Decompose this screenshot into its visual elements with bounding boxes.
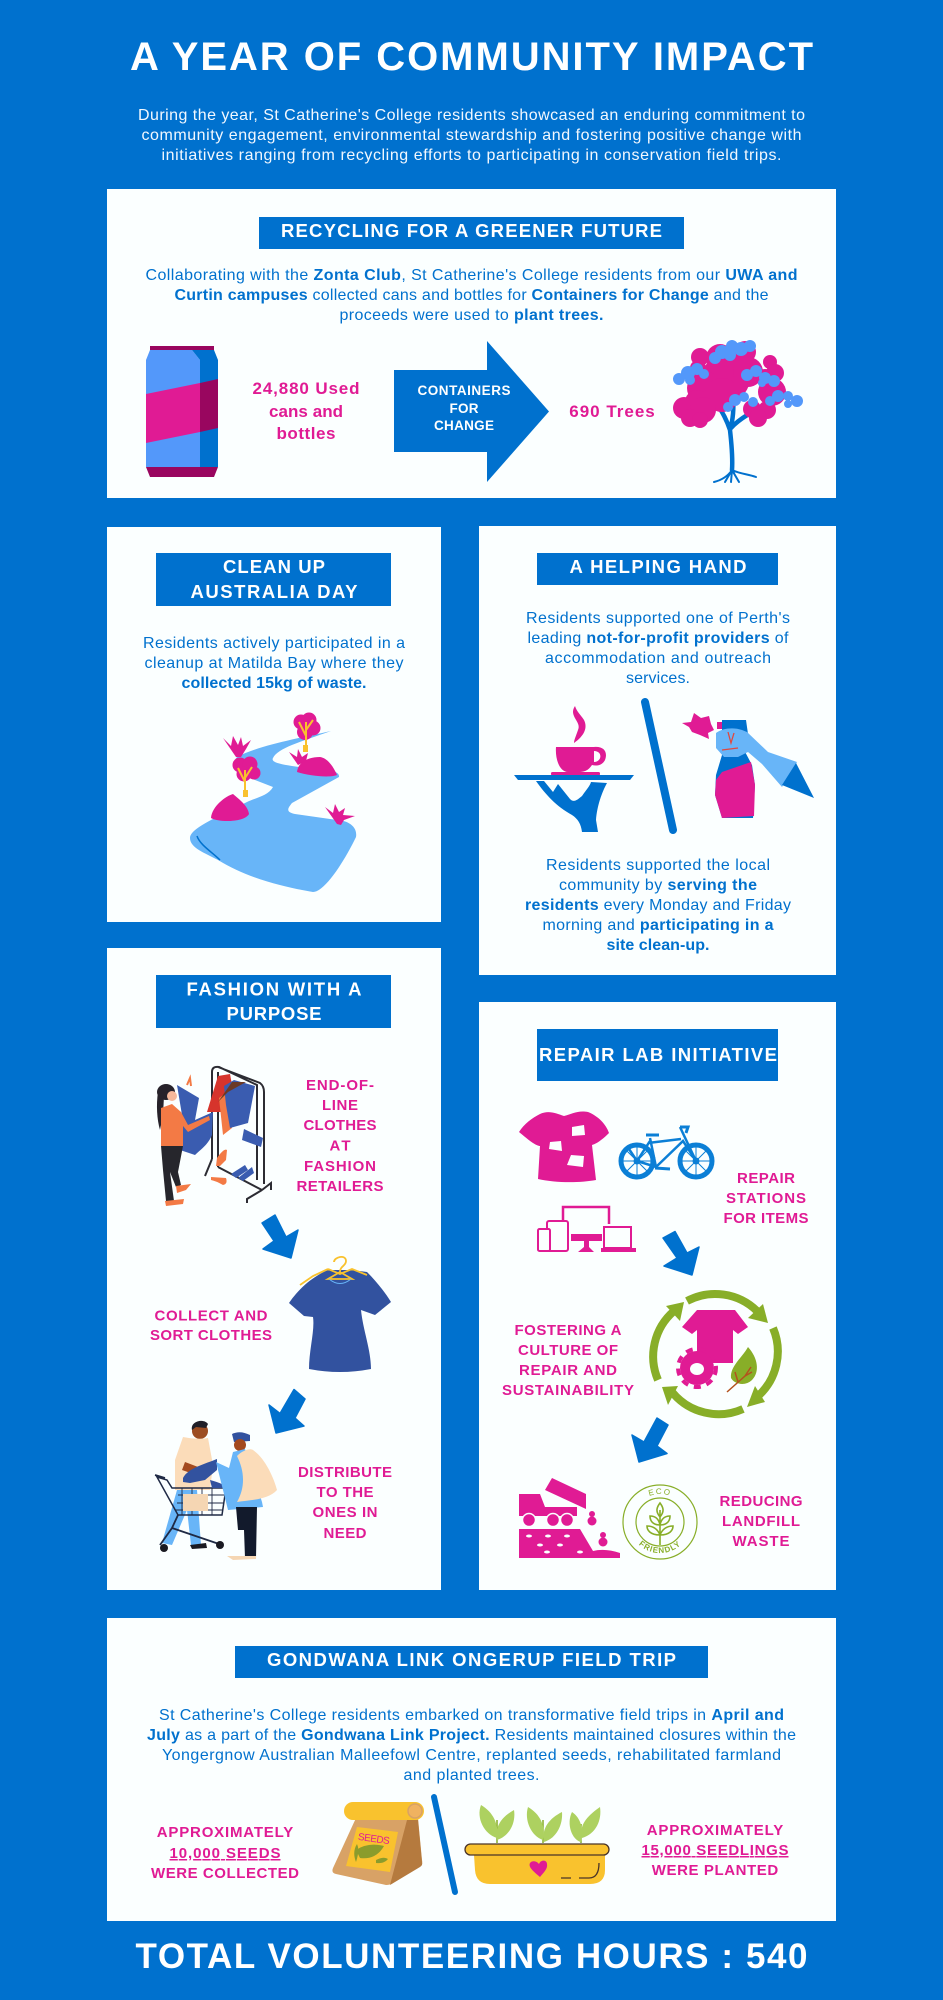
heading: gondwana: GONDWANA LINK ONGERUP FIELD TRIP <box>267 1649 676 1670</box>
text: helping description two: site clean-up. <box>606 937 710 954</box>
text: seedlings planted: WERE PLANTED <box>652 1862 778 1879</box>
text: cans count <box>252 379 360 443</box>
text: gondwana description: St Catherine's College residents embarked on transformative field trips in April and <box>159 1707 784 1724</box>
arrow: containers for change: CHANGE <box>434 418 494 433</box>
text: fostering a culture: FOSTERING A <box>514 1322 622 1339</box>
heading: gondwana <box>235 1646 708 1678</box>
text: helping description one: services. <box>626 670 690 687</box>
text: helping description one: accommodation and outreach <box>545 650 771 667</box>
text: clean up description: cleanup at Matilda Bay where they <box>144 655 404 672</box>
text: fostering a culture: SUSTAINABILITY <box>502 1382 634 1399</box>
panel: gondwana link <box>107 1618 836 1921</box>
heading: helping hand <box>537 553 778 585</box>
text: clean up description <box>143 635 405 692</box>
icon: eco friendly badge <box>622 1484 698 1560</box>
panel: a helping hand <box>479 526 836 975</box>
icon: patched t-shirt <box>519 1111 609 1182</box>
icon: bicycle <box>621 1127 712 1177</box>
text: helping description one: leading not-for-profit providers of <box>528 630 789 647</box>
text: seeds collected <box>151 1824 299 1882</box>
icon: hand with spray bottle <box>682 713 814 818</box>
text: gondwana description <box>147 1707 796 1784</box>
text: end-of-line clothes: LINE <box>322 1097 358 1114</box>
text: helping description one <box>526 610 790 687</box>
text: distribute: DISTRIBUTE <box>298 1464 392 1481</box>
arrow: containers for change <box>394 341 549 482</box>
heading: recycling: RECYCLING FOR A GREENER FUTURE <box>281 220 662 241</box>
intro text: During the year, St Catherine's College residents showcased an enduring commitment to <box>138 107 805 124</box>
intro text <box>138 107 805 164</box>
text: seeds collected: 10,000 SEEDS <box>170 1845 280 1862</box>
arrow: containers for change: CONTAINERS <box>418 383 510 398</box>
title: A YEAR OF COMMUNITY IMPACT <box>130 35 813 79</box>
text: end-of-line clothes: CLOTHES <box>304 1117 376 1134</box>
panel: fashion with a purpose <box>107 948 441 1590</box>
heading: repair lab: REPAIR LAB INITIATIVE <box>539 1044 777 1065</box>
text: recycling description: Collaborating with the Zonta Club, St Catherine's College residents from our UWA and <box>146 267 798 284</box>
text: gondwana description: July as a part of the Gondwana Link Project. Residents maintained closures within the <box>147 1727 796 1744</box>
text: trees count: 690 Trees <box>569 402 655 421</box>
text: seedlings planted: APPROXIMATELY <box>647 1822 783 1839</box>
text: gondwana description: and planted trees. <box>404 1767 540 1784</box>
icon: dump truck and landfill <box>519 1478 620 1558</box>
icon: river with trees <box>190 712 356 892</box>
text: helping description two: residents every Monday and Friday <box>525 897 791 914</box>
text: end-of-line clothes <box>296 1077 384 1195</box>
text: recycling description <box>146 267 798 324</box>
text: distribute: ONES IN <box>312 1504 378 1521</box>
intro text: initiatives ranging from recycling efforts to participating in conservation field trips. <box>162 147 782 164</box>
text: seeds collected: APPROXIMATELY <box>157 1824 293 1841</box>
heading: fashion: FASHION WITH A <box>186 978 362 1000</box>
panel: clean up australia day <box>107 527 441 922</box>
icon: seedlings in pot <box>465 1805 609 1884</box>
heading: clean up <box>156 553 391 606</box>
arrow: down right <box>663 1232 699 1275</box>
panel: recycling <box>107 189 836 498</box>
text: repair stations <box>724 1170 808 1227</box>
panel: repair lab initiative <box>479 1002 836 1590</box>
text: repair stations: STATIONS <box>726 1190 806 1207</box>
icon: seed bag <box>332 1802 424 1885</box>
icon: electronic devices <box>538 1207 636 1252</box>
text: helping description one: Residents supported one of Perth's <box>526 610 790 627</box>
icon: t-shirt on hanger <box>289 1257 391 1372</box>
text: clean up description: collected 15kg of waste. <box>182 675 366 692</box>
text: reducing landfill waste: REDUCING <box>720 1493 802 1510</box>
text: collect and sort: COLLECT AND <box>154 1308 268 1324</box>
icon: can <box>146 346 218 477</box>
icon: tree <box>673 340 803 482</box>
heading: fashion <box>156 975 391 1028</box>
icon: eco friendly badge: FRIENDLY <box>639 1540 679 1554</box>
text: seeds collected: WERE COLLECTED <box>151 1865 299 1882</box>
arrow: down right <box>262 1215 298 1258</box>
arrow: down left <box>632 1418 668 1462</box>
text: seedlings planted <box>642 1822 788 1879</box>
icon: recycling circle with shirt, gear and leaf <box>653 1294 778 1414</box>
divider slash <box>434 1797 455 1892</box>
heading: clean up: CLEAN UP <box>223 556 325 577</box>
text: gondwana description: Yongergnow Australian Malleefowl Centre, replanted seeds, rehabilitated farmland <box>162 1747 781 1764</box>
icon: hand holding tray with cup <box>514 706 634 832</box>
text: recycling description: proceeds were used to plant trees. <box>340 307 604 324</box>
text: cans count: cans and <box>269 402 343 421</box>
text: repair stations: REPAIR <box>737 1170 795 1187</box>
text: repair stations: FOR ITEMS <box>724 1210 808 1227</box>
heading: repair lab <box>537 1029 778 1081</box>
heading: helping hand: A HELPING HAND <box>570 556 746 577</box>
arrow: containers for change: FOR <box>450 401 479 416</box>
text: end-of-line clothes: END-OF- <box>306 1077 374 1094</box>
text: recycling description: Curtin campuses collected cans and bottles for Containers for Change and the <box>174 287 769 304</box>
text: end-of-line clothes: RETAILERS <box>296 1178 384 1195</box>
icon: eco friendly badge: ECO <box>648 1488 670 1496</box>
text: clean up description: Residents actively participated in a <box>143 635 405 652</box>
text: collect and sort: SORT CLOTHES <box>150 1327 272 1344</box>
text: distribute <box>298 1464 392 1542</box>
text: end-of-line clothes: AT <box>330 1138 350 1154</box>
text: reducing landfill waste: WASTE <box>732 1533 790 1550</box>
text: end-of-line clothes: FASHION <box>304 1158 376 1175</box>
text: reducing landfill waste <box>720 1493 802 1550</box>
text: cans count: bottles <box>276 424 336 443</box>
text: collect and sort <box>150 1308 272 1344</box>
heading: recycling <box>259 217 684 249</box>
text: fostering a culture: REPAIR AND <box>519 1362 617 1379</box>
icon: woman at clothes rack <box>157 1067 271 1206</box>
divider slash <box>645 702 673 830</box>
text: reducing landfill waste: LANDFILL <box>722 1513 800 1530</box>
heading: clean up: AUSTRALIA DAY <box>190 581 358 602</box>
intro text: community engagement, environmental stewardship and fostering positive change with <box>142 127 802 144</box>
icon: seed bag: SEEDS <box>357 1832 391 1847</box>
text: helping description two: community by serving the <box>559 877 757 894</box>
text: helping description two: morning and participating in a <box>542 917 774 934</box>
heading: fashion: PURPOSE <box>226 1003 322 1024</box>
text: fostering a culture <box>502 1322 634 1399</box>
total volunteering hours: TOTAL VOLUNTEERING HOURS : 540 <box>136 1937 808 1976</box>
text: distribute: TO THE <box>316 1484 374 1501</box>
icon: people with donation cart <box>155 1421 277 1560</box>
text: cans count: 24,880 Used <box>252 379 360 398</box>
text: distribute: NEED <box>324 1525 367 1542</box>
text: helping description two <box>525 857 791 954</box>
text: seedlings planted: 15,000 SEEDLINGS <box>642 1842 788 1859</box>
text: helping description two: Residents supported the local <box>546 857 770 874</box>
text: fostering a culture: CULTURE OF <box>518 1342 618 1359</box>
arrow: down left <box>269 1390 305 1433</box>
